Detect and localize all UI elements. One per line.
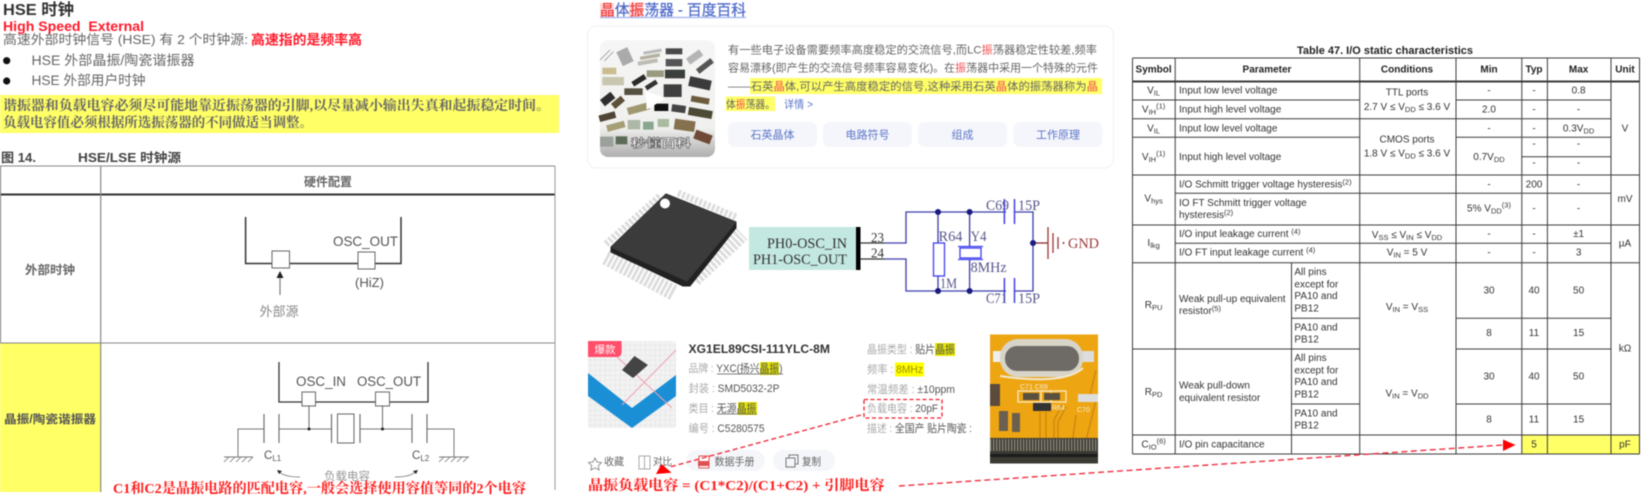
product attributes right column: 负载电容 : 20pF — [867, 401, 938, 415]
typ column: - — [1532, 158, 1536, 169]
parameter column: hysteresis — [1179, 210, 1224, 221]
parameter column: Weak pull-up equivalent — [1179, 294, 1286, 305]
video thumbnail of crystal components: 秒懂百科 — [631, 136, 692, 150]
table grid — [1132, 58, 1640, 454]
symbol column: I — [1147, 238, 1150, 249]
table header row: Unit — [1615, 65, 1635, 76]
typ column: - — [1532, 86, 1536, 96]
parameter column: Input high level voltage — [1179, 152, 1282, 163]
min column: 8 — [1486, 414, 1492, 425]
product photo — [588, 341, 676, 428]
typ column: - — [1532, 248, 1536, 259]
typ column: - — [1532, 139, 1536, 150]
parameter column: PA10 and — [1294, 409, 1338, 420]
symbol column: V — [1144, 194, 1151, 205]
product attributes left column: 类目 : 无源晶振 — [688, 401, 756, 415]
parameter column: Input low level voltage — [1179, 124, 1278, 135]
table header row — [1136, 65, 1635, 76]
conditions column: V — [1386, 302, 1393, 313]
symbol column: IH — [1149, 155, 1156, 164]
link buttons: 组成 — [952, 128, 974, 142]
product attributes left column: 封装 : SMD5032-2P — [688, 381, 780, 395]
parameter column: Weak pull-down — [1179, 380, 1250, 391]
parameter column: I/O FT input leakage current — [1179, 248, 1303, 259]
panel: Baidu Baike crystal oscillator search result — [588, 2, 1114, 168]
panel: LCSC product listing — [588, 341, 972, 494]
conditions column: IN — [1392, 392, 1400, 401]
conditions column: DD — [1431, 233, 1443, 242]
table title: Table 47. I/O static characteristics — [1297, 45, 1473, 57]
summary paragraph with highlight: 容易漂移(即产生的交流信号频率容易变化)。在振荡器中采用一个特殊的元件 — [728, 60, 1098, 74]
unit column: pF — [1619, 439, 1631, 450]
symbol column: IL — [1154, 88, 1160, 98]
photo: PCB with crystal and capacitors: C71 C69 — [1020, 384, 1048, 391]
summary paragraph with highlight: 体振荡器。 — [726, 97, 775, 111]
min column: - — [1487, 86, 1491, 96]
unit column: V — [1622, 124, 1629, 135]
typ column: 5 — [1531, 439, 1537, 450]
typ column: 40 — [1528, 371, 1540, 382]
symbol column: R — [1145, 387, 1152, 398]
video thumbnail of crystal components — [598, 40, 715, 157]
min column: - — [1487, 180, 1491, 191]
table header row: Symbol — [1136, 65, 1172, 76]
action buttons — [588, 450, 835, 471]
conditions column: V — [1372, 230, 1378, 241]
text: HSE has two clock sources: 高速外部时钟信号 (HSE) 有 2 个时钟源: — [3, 32, 248, 47]
conditions column: SS — [1418, 305, 1428, 314]
typ column: - — [1532, 124, 1536, 135]
search result title: 晶体振荡器 - 百度百科 — [600, 2, 746, 19]
circuit: crystal resonator with load capacitors: L2 — [420, 454, 430, 463]
figure caption: HSE/LSE 时钟源 — [78, 150, 182, 165]
bullet list: HSE 外部用户时钟 — [32, 72, 146, 88]
symbol column — [1141, 86, 1166, 451]
min column: 0.7V — [1473, 152, 1494, 163]
circuit: external clock: OSC_OUT — [333, 233, 398, 249]
conditions column: = V — [1400, 389, 1418, 400]
parameter column: PB12 — [1294, 389, 1319, 400]
product attributes right column: 频率 : 8MHz — [867, 362, 923, 376]
symbol column: lkg — [1150, 241, 1160, 250]
row label: crystal or ceramic resonator: 晶振/陶瓷谐振器 — [4, 412, 97, 426]
highlighted I/O capacitance cells — [1522, 435, 1640, 454]
min column: (3) — [1502, 201, 1511, 210]
symbol column: IH — [1149, 108, 1156, 117]
max column: 50 — [1573, 371, 1585, 382]
symbol column: hys — [1151, 197, 1163, 206]
annotation: high speed means high frequency: 高速指的是频率高 — [251, 32, 362, 48]
table header: 硬件配置 — [304, 174, 352, 189]
product name: XG1EL89CSI-111YLC-8M — [688, 342, 830, 356]
callout: load capacitance dashed box — [864, 400, 942, 418]
unit column: mV — [1618, 194, 1633, 205]
schematic: crystal oscillator network — [860, 198, 1099, 307]
typ column: - — [1532, 204, 1536, 215]
panel: I/O static characteristics table — [1132, 45, 1640, 454]
typ column: 11 — [1529, 414, 1540, 425]
conditions column: ≤ 3.6 V — [1416, 102, 1450, 113]
schematic: crystal oscillator network: Y4 — [971, 229, 987, 245]
link buttons: 电路符号 — [846, 128, 890, 142]
symbol column: PD — [1152, 390, 1163, 399]
highlighted note about resonator and load capacitors — [0, 95, 559, 133]
symbol column: PU — [1152, 303, 1162, 312]
max column: 15 — [1573, 328, 1585, 339]
max column: - — [1577, 139, 1580, 150]
typ column: - — [1532, 229, 1536, 240]
parameter column: resistor — [1179, 306, 1212, 317]
circuit: external clock — [246, 217, 401, 319]
conditions column: IN — [1393, 251, 1401, 260]
parameter column: PA10 and — [1294, 291, 1338, 302]
parameter column: PA10 and — [1294, 323, 1338, 334]
product attributes right column — [867, 342, 972, 435]
parameter column: I/O input leakage current — [1179, 229, 1289, 240]
unit column: µA — [1619, 239, 1632, 250]
pin label block: PH0-OSC_IN — [767, 236, 847, 252]
highlighted note about resonator and load capacitors: 谐振器和负载电容必须尽可能地靠近振荡器的引脚,以尽量减小输出失真和起振稳定时间。 — [3, 97, 550, 113]
conditions column: = V — [1400, 302, 1418, 313]
conditions column: 1.8 V ≤ V — [1364, 149, 1405, 160]
circuit: external clock: 外部源 — [259, 304, 299, 319]
schematic: crystal oscillator network: R64 — [938, 229, 963, 245]
circuit: crystal resonator with load capacitors — [224, 362, 469, 483]
summary paragraph with highlight: 详情 > — [784, 97, 813, 111]
summary paragraph with highlight: ——石英晶体,可以产生高度稳定的信号,这种采用石英 晶体的振荡器称为晶 — [728, 79, 1098, 93]
pin label block — [749, 227, 860, 270]
parameter column: (5) — [1212, 304, 1221, 313]
table header row: Conditions — [1381, 65, 1434, 76]
typ column: - — [1532, 105, 1536, 116]
circuit: crystal resonator with load capacitors: 负载电容 — [324, 469, 370, 483]
parameter column: All pins — [1294, 267, 1327, 278]
parameter column: (2) — [1224, 208, 1234, 217]
symbol column: V — [1142, 105, 1149, 116]
pin label block: PH1-OSC_OUT — [753, 252, 847, 268]
max column: - — [1577, 204, 1580, 215]
highlighted note about resonator and load capacitors: 负载电容值必须根据所选振荡器的不同做适当调整。 — [3, 114, 313, 130]
table header row: Min — [1480, 65, 1498, 76]
symbol column: IL — [1154, 127, 1160, 136]
product attributes right column: 描述 : 全国产 贴片陶瓷 : — [867, 421, 972, 435]
heading: HSE clock: HSE 时钟 — [3, 1, 74, 19]
min column: 2.0 — [1482, 105, 1496, 116]
parameter column: except for — [1294, 279, 1339, 290]
icon: LQFP microcontroller chip — [606, 193, 742, 293]
symbol column: (6) — [1157, 436, 1166, 445]
parameter column: PB12 — [1294, 304, 1319, 315]
conditions column: CMOS ports — [1379, 135, 1435, 146]
typ column: 40 — [1528, 285, 1540, 296]
circuit: crystal resonator with load capacitors: C — [412, 450, 420, 462]
max column: - — [1577, 180, 1580, 191]
annotation: High Speed External: High Speed External — [3, 18, 144, 34]
symbol column: (1) — [1156, 102, 1166, 111]
summary paragraph with highlight — [726, 42, 1102, 111]
product attributes right column: 晶振类型 : 贴片晶振 — [867, 342, 955, 356]
product attributes left column: 编号 : C5280575 — [688, 421, 764, 435]
product photo: 爆款 — [594, 343, 616, 356]
unit column — [1618, 124, 1633, 450]
conditions column: 2.7 V ≤ V — [1364, 102, 1405, 113]
conditions column: TTL ports — [1386, 88, 1428, 99]
schematic: crystal oscillator network: C71 — [986, 291, 1007, 307]
min column: DD — [1491, 207, 1502, 216]
action buttons: 收藏 — [604, 455, 624, 468]
parameter column: Input low level voltage — [1179, 86, 1278, 96]
parameter column: (4) — [1291, 227, 1301, 236]
schematic: crystal oscillator network: 15P — [1018, 198, 1040, 214]
parameter column: IO FT Schmitt trigger voltage — [1179, 198, 1307, 209]
conditions column: DD — [1405, 105, 1416, 114]
circuit: crystal resonator with load capacitors: C — [264, 450, 272, 462]
typ column — [1526, 86, 1543, 450]
bullet list: HSE 外部晶振/陶瓷谐振器 — [32, 53, 195, 68]
photo: PCB with crystal and capacitors — [990, 334, 1098, 464]
conditions column: ≤ V — [1414, 230, 1432, 241]
parameter column: PA10 and — [1294, 377, 1338, 388]
action buttons: 对比 — [653, 455, 672, 468]
typ column: 11 — [1529, 328, 1540, 339]
circuit: crystal resonator with load capacitors: OSC_IN — [296, 374, 346, 389]
schematic: crystal oscillator network: 15P — [1018, 291, 1040, 307]
min column — [1467, 86, 1511, 425]
conditions column: DD — [1418, 392, 1429, 401]
conditions column: V — [1387, 248, 1393, 259]
min column: 30 — [1483, 371, 1495, 382]
symbol column: V — [1147, 86, 1154, 96]
conditions column: ≤ V — [1388, 230, 1406, 241]
circuit: crystal resonator with load capacitors: L1 — [272, 454, 282, 463]
figure caption: 图 14. — [1, 151, 36, 165]
circuit: external clock: (HiZ) — [355, 276, 384, 290]
parameter column: I/O pin capacitance — [1179, 439, 1265, 450]
link buttons — [728, 122, 1102, 147]
arrow: from formula to I/O pin capacitance — [899, 440, 1516, 486]
link buttons: 工作原理 — [1036, 128, 1080, 142]
table header row: Typ — [1525, 65, 1543, 76]
symbol column: C — [1141, 439, 1149, 450]
max column: 50 — [1573, 285, 1585, 296]
baike card — [588, 26, 1114, 168]
conditions column: V — [1385, 389, 1392, 400]
conditions column: DD — [1405, 152, 1416, 161]
summary paragraph with highlight: 有一些电子设备需要频率高度稳定的交流信号,而LC 振荡器稳定性较差,频率 — [728, 42, 1097, 56]
panel: HSE clock datasheet excerpt — [0, 1, 559, 495]
min column: DD — [1494, 155, 1505, 164]
arrow: from load capacitance box to formula — [656, 415, 861, 474]
table: clock source hardware configuration — [0, 166, 555, 492]
max column: 0.8 — [1572, 86, 1586, 96]
max column — [1563, 86, 1595, 425]
figure caption — [1, 150, 182, 165]
schematic: crystal oscillator network: GND — [1068, 236, 1099, 252]
product attributes left column — [688, 361, 783, 435]
min column: - — [1487, 248, 1491, 259]
schematic: crystal oscillator network: 8MHz — [971, 260, 1007, 276]
parameter column: equivalent resistor — [1179, 393, 1261, 404]
conditions column: IN — [1393, 305, 1400, 314]
max column: 0.3V — [1563, 124, 1583, 135]
circuit: crystal resonator with load capacitors: OSC_OUT — [357, 374, 421, 389]
schematic: crystal oscillator network: C69 — [986, 198, 1009, 214]
annotation: load capacitance formula: 晶振负载电容 = (C1*C2)/(C1+C2) + 引脚电容 — [588, 477, 884, 494]
parameter column: (2) — [1342, 178, 1352, 187]
action buttons: 数据手册 — [714, 455, 755, 468]
parameter column: (4) — [1306, 246, 1316, 255]
parameter column: Input high level voltage — [1179, 105, 1282, 116]
symbol column: V — [1142, 152, 1149, 163]
max column: DD — [1583, 127, 1595, 136]
product attributes right column: 常温频差 : ±10ppm — [867, 382, 955, 396]
schematic: crystal oscillator network: 24 — [871, 246, 884, 262]
parameter column: PB12 — [1294, 334, 1319, 345]
row label: external clock: 外部时钟 — [25, 262, 75, 277]
parameter column: except for — [1294, 365, 1339, 376]
max column: - — [1577, 158, 1580, 169]
photo: PCB with crystal and capacitors: C70 — [1077, 407, 1090, 414]
conditions column — [1364, 88, 1450, 401]
typ column: 200 — [1526, 180, 1543, 191]
min column: - — [1487, 229, 1491, 240]
conditions column: SS — [1378, 233, 1388, 242]
max column: ±1 — [1573, 229, 1585, 240]
min column: 5% V — [1467, 204, 1491, 215]
min column: 8 — [1486, 328, 1492, 339]
max column: - — [1577, 105, 1580, 116]
min column: 30 — [1483, 285, 1495, 296]
parameter column — [1179, 86, 1352, 450]
conditions column: ≤ 3.6 V — [1416, 149, 1450, 160]
symbol column: V — [1147, 124, 1154, 135]
product attributes left column: 品牌 : YXC(扬兴晶振) — [688, 361, 782, 375]
table header row: Parameter — [1243, 65, 1292, 76]
symbol column: IO — [1149, 442, 1157, 451]
schematic: crystal oscillator network: 23 — [871, 231, 884, 246]
table header row: Max — [1569, 65, 1589, 76]
min column: - — [1487, 124, 1491, 135]
max column: 3 — [1576, 248, 1582, 259]
photo: PCB with crystal and capacitors: R64 — [1052, 405, 1065, 412]
panel: MCU crystal schematic — [606, 193, 1099, 307]
schematic: crystal oscillator network: 1M — [940, 276, 957, 292]
parameter column: PB12 — [1294, 420, 1319, 431]
bullet list — [3, 53, 195, 88]
max column: 15 — [1573, 414, 1585, 425]
conditions column: IN — [1406, 233, 1414, 242]
symbol column: R — [1145, 300, 1152, 311]
conditions column: = 5 V — [1401, 248, 1428, 259]
link buttons: 石英晶体 — [750, 128, 794, 142]
unit column: kΩ — [1619, 344, 1632, 355]
symbol column: (1) — [1156, 149, 1166, 158]
parameter column: I/O Schmitt trigger voltage hysteresis — [1179, 180, 1342, 191]
action buttons: 复制 — [802, 455, 821, 468]
parameter column: All pins — [1294, 353, 1327, 364]
